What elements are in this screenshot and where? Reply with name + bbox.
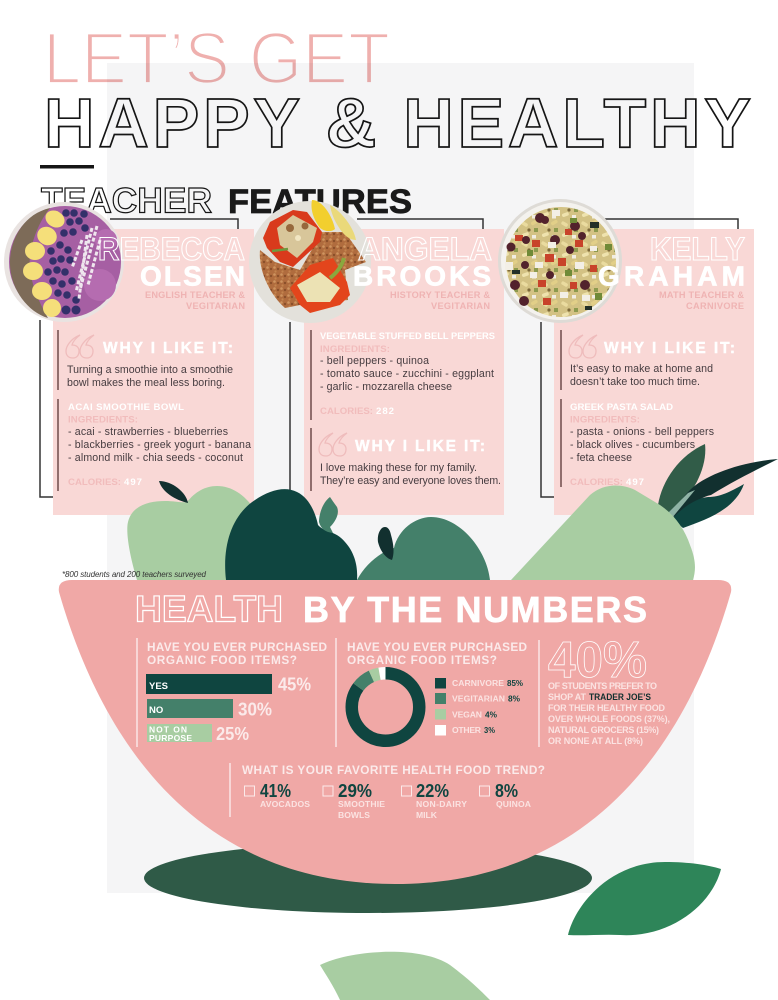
recipe: CALORIES: xyxy=(68,477,121,488)
card bracket xyxy=(290,219,483,505)
recipe: - feta cheese xyxy=(570,452,632,464)
trend: quinoa: 8% xyxy=(495,781,518,801)
title: let's get: LET’S GET xyxy=(43,18,390,99)
why i like it: WHY I LIKE IT: xyxy=(604,340,735,357)
recipe: INGREDIENTS: xyxy=(68,414,138,426)
bar: no: NO xyxy=(149,705,163,716)
dark green apple xyxy=(225,489,357,580)
card bracket xyxy=(541,219,738,497)
leaf: bottom right xyxy=(568,862,721,935)
name: rebecca olsen: OLSEN xyxy=(140,260,245,292)
recipe: - pasta - onions - bell peppers xyxy=(570,426,714,438)
dark apple leaf xyxy=(319,497,338,533)
panel: kelly graham card xyxy=(498,199,754,515)
recipe xyxy=(58,399,251,491)
recipe: - bell peppers - quinoa xyxy=(320,355,429,367)
bar: not on purpose: 25% xyxy=(216,724,249,744)
stat: 40 percent trader joe's: NATURAL GROCERS (15%) xyxy=(548,725,659,735)
trend: avocados: 41% xyxy=(260,781,291,801)
recipe: GREEK PASTA SALAD xyxy=(570,402,673,413)
pear leaves xyxy=(658,444,778,528)
why i like it: WHY I LIKE IT: xyxy=(355,438,485,455)
role xyxy=(659,290,744,311)
trend: smoothie bowls: BOWLS xyxy=(338,810,370,820)
bar chart: organic purchases: ORGANIC FOOD ITEMS? xyxy=(147,653,297,667)
bar: not on purpose: NOT ON xyxy=(149,724,187,734)
bar: not on purpose xyxy=(147,724,249,744)
bar: no xyxy=(147,699,272,720)
mid green apple xyxy=(357,517,490,580)
trend: non-dairy milk: NON-DAIRY xyxy=(416,799,467,809)
why i like it: doesn’t take too much time. xyxy=(570,376,700,388)
footnote: *800 students and 200 teachers surveyed xyxy=(62,570,207,579)
stat: 40 percent trader joe's: 40% xyxy=(548,631,647,688)
bar: yes: YES xyxy=(149,681,168,692)
leaf: bottom xyxy=(320,952,490,1000)
legend: VEGITARIAN xyxy=(452,694,505,704)
title: happy and healthy: HAPPY & HEALTHY xyxy=(44,84,751,162)
recipe: 497 xyxy=(626,477,644,488)
legend: VEGAN xyxy=(452,710,482,720)
survey: favorite health food trend xyxy=(230,763,545,820)
recipe: - blackberries - greek yogurt - banana xyxy=(68,439,251,451)
stat: 40 percent trader joe's: TRADER JOE’S xyxy=(589,692,651,702)
trend: non-dairy milk: MILK xyxy=(416,810,438,820)
card background xyxy=(53,229,254,515)
title rule xyxy=(40,165,94,168)
role xyxy=(145,290,245,311)
recipe: ACAI SMOOTHIE BOWL xyxy=(68,402,184,413)
legend: 85% xyxy=(507,678,523,688)
card background xyxy=(304,229,504,515)
trend: smoothie bowls: 29% xyxy=(338,781,372,801)
bar: not on purpose: PURPOSE xyxy=(149,733,192,743)
donut chart: diet: HAVE YOU EVER PURCHASED xyxy=(347,640,527,654)
trend: smoothie bowls: SMOOTHIE xyxy=(338,799,385,809)
why i like it: bowl makes the meal less boring. xyxy=(67,377,225,389)
heading: teacher features xyxy=(41,182,412,221)
recipe xyxy=(561,399,714,488)
icon: quote mark xyxy=(319,433,347,456)
recipe: - garlic - mozzarella cheese xyxy=(320,381,452,393)
apple stem xyxy=(159,481,188,503)
stat: 40 percent trader joe's: OR NONE AT ALL (8%) xyxy=(548,736,643,746)
name: rebecca olsen: REBECCA xyxy=(98,231,245,267)
recipe: CALORIES: xyxy=(570,477,623,488)
bar: yes xyxy=(146,674,311,694)
trend: non-dairy milk: 22% xyxy=(416,781,449,801)
why i like it: It’s easy to make at home and xyxy=(570,363,713,375)
survey: favorite health food trend: WHAT IS YOUR FAVORITE HEALTH FOOD TREND? xyxy=(242,763,545,777)
recipe: INGREDIENTS: xyxy=(320,344,390,355)
food photo: greek pasta salad xyxy=(498,199,622,323)
recipe: - black olives - cucumbers xyxy=(570,439,695,451)
recipe: INGREDIENTS: xyxy=(570,414,640,426)
role: MATH TEACHER & xyxy=(659,290,744,300)
why i like it: I love making these for my family. xyxy=(320,462,477,474)
bowl xyxy=(59,580,731,884)
heading xyxy=(135,588,647,630)
name: rebecca olsen xyxy=(98,231,245,292)
panel: health by the numbers bowl xyxy=(59,580,731,884)
donut chart: diet: ORGANIC FOOD ITEMS? xyxy=(347,653,497,667)
recipe xyxy=(311,330,496,420)
legend: CARNIVORE xyxy=(452,678,504,688)
recipe: 282 xyxy=(376,406,394,417)
stat: 40 percent trader joe's xyxy=(539,631,670,747)
recipe: VEGETABLE STUFFED BELL PEPPERS xyxy=(320,331,496,342)
bar: no: 30% xyxy=(238,700,272,720)
name: kelly graham: GRAHAM xyxy=(598,260,745,292)
role: HISTORY TEACHER & xyxy=(390,290,490,300)
stat: 40 percent trader joe's: OF STUDENTS PREFER TO xyxy=(548,681,657,691)
donut xyxy=(352,673,419,741)
why i like it xyxy=(58,330,233,390)
recipe: - tomato sauce - zucchini - eggplant xyxy=(320,368,494,380)
pear xyxy=(511,486,695,580)
heading: teacher features: TEACHER xyxy=(41,182,212,220)
recipe: CALORIES: xyxy=(320,406,373,417)
why i like it xyxy=(311,428,501,491)
role: VEGITARIAN xyxy=(186,301,245,311)
food photo: stuffed peppers xyxy=(249,200,371,323)
heading: teacher features: FEATURES xyxy=(228,183,412,221)
panel: angela brooks card xyxy=(249,200,504,515)
recipe: 497 xyxy=(124,477,142,488)
donut chart: diet xyxy=(336,638,527,747)
stat: 40 percent trader joe's: FOR THEIR HEALTHY FOOD xyxy=(548,703,666,713)
why i like it xyxy=(561,330,735,390)
icon: quote mark xyxy=(569,335,597,358)
role: ENGLISH TEACHER & xyxy=(145,290,245,300)
name: angela brooks: ANGELA xyxy=(358,231,492,267)
name: kelly graham: KELLY xyxy=(650,231,745,267)
name: angela brooks xyxy=(353,231,492,292)
trend: avocados: AVOCADOS xyxy=(260,799,310,809)
bar chart: organic purchases xyxy=(137,638,327,747)
stat: 40 percent trader joe's: SHOP AT xyxy=(548,692,586,702)
legend xyxy=(435,678,523,736)
name: angela brooks: BROOKS xyxy=(353,260,491,292)
illustration: fruit and vegetables behind the bowl xyxy=(127,444,778,580)
trend: quinoa: QUINOA xyxy=(496,799,531,809)
heading: HEALTH xyxy=(135,588,283,630)
food photo: acai bowl xyxy=(4,202,124,322)
legend: OTHER xyxy=(452,725,482,735)
role xyxy=(390,290,490,311)
decorative bowl shadow xyxy=(144,843,592,913)
card background xyxy=(554,229,754,515)
trend: quinoa xyxy=(480,781,531,809)
background panel xyxy=(107,63,694,893)
recipe: - acai - strawberries - blueberries xyxy=(68,426,228,438)
icon: quote mark xyxy=(66,335,94,358)
trend: non-dairy milk xyxy=(402,781,467,820)
trend: avocados xyxy=(244,781,310,809)
name: kelly graham xyxy=(598,231,745,292)
trend: smoothie bowls xyxy=(323,781,385,820)
why i like it: Turning a smoothie into a smoothie xyxy=(67,364,233,376)
stat: 40 percent trader joe's: OVER WHOLE FOODS (37%), xyxy=(548,714,670,724)
role: VEGITARIAN xyxy=(431,301,490,311)
why i like it: They’re easy and everyone loves them. xyxy=(320,475,501,487)
heading: BY THE NUMBERS xyxy=(303,589,647,630)
role: CARNIVORE xyxy=(686,301,744,311)
legend: 8% xyxy=(508,694,520,704)
legend: 4% xyxy=(485,710,497,720)
bar chart: organic purchases: HAVE YOU EVER PURCHASED xyxy=(147,640,327,654)
card bracket xyxy=(40,219,238,497)
legend: 3% xyxy=(484,725,495,735)
bar: yes: 45% xyxy=(278,674,311,694)
mid apple stem xyxy=(378,527,394,560)
recipe: - almond milk - chia seeds - coconut xyxy=(68,452,243,464)
light green apple xyxy=(127,486,270,580)
panel: rebecca olsen card xyxy=(4,202,254,515)
why i like it: WHY I LIKE IT: xyxy=(103,340,233,357)
